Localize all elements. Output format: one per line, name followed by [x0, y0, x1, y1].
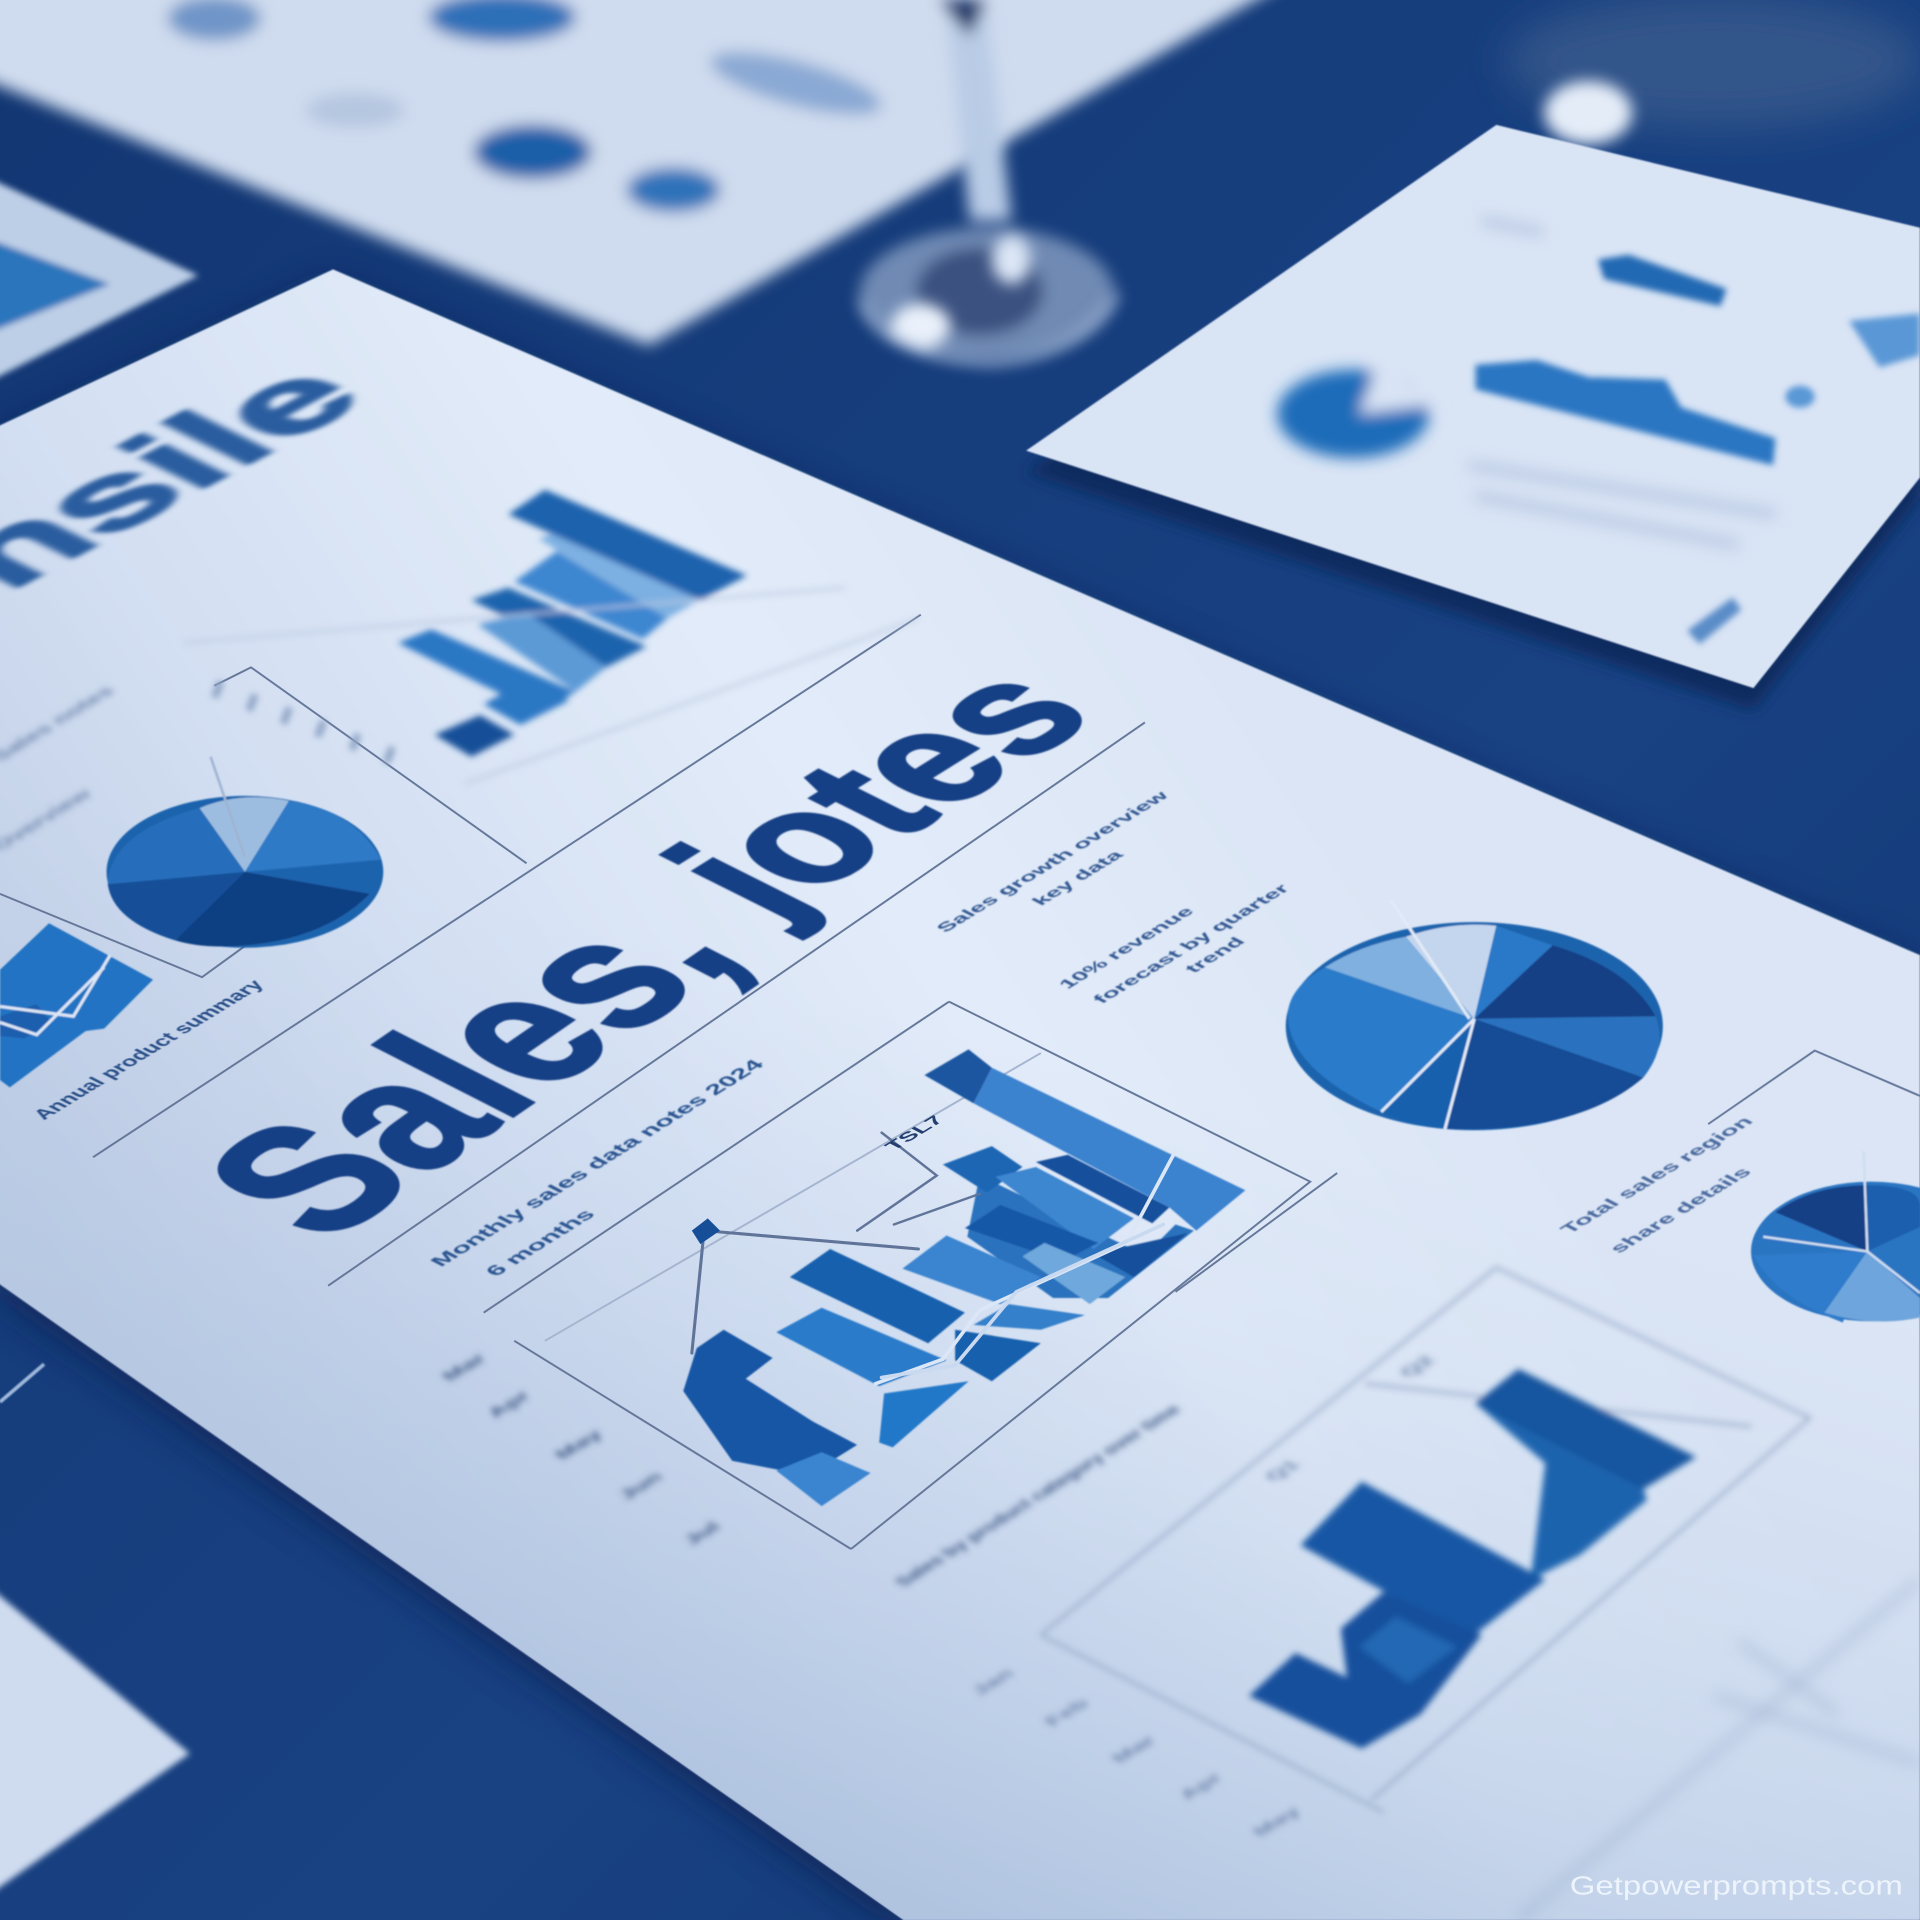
text block: subheading under title: Monthly sales data notes 2024 [425, 1057, 769, 1269]
axis labels [438, 1352, 1185, 1589]
panel: right document [1026, 125, 1920, 710]
blurred text lines on right document [1469, 220, 1776, 545]
axis labels: Apr [483, 1389, 535, 1420]
bars [683, 1049, 1245, 1506]
lower chart axis labels: Apr [1175, 1771, 1227, 1802]
text block: caption below left chart: Annual product summary [28, 977, 269, 1123]
text block: notes above pie: Sales growth overview [932, 789, 1174, 935]
central bar chart [438, 1002, 1337, 1589]
icon: blurred glass top right [1506, 0, 1920, 129]
chart frame [514, 1002, 1337, 1549]
icon: small stray mark on table [0, 1364, 44, 1402]
text block: notes above pie: key data [1028, 848, 1128, 908]
lower chart axis labels [967, 1354, 1440, 1839]
text block: left notes [0, 684, 119, 853]
right pie chart [1751, 1151, 1920, 1322]
axis labels: Jun [614, 1471, 668, 1502]
axis labels: Mar [438, 1352, 491, 1383]
panel: left edge blurred document [0, 178, 198, 382]
lower chart axis labels: Feb [1040, 1697, 1094, 1728]
panel: top blurred document [0, 0, 1298, 345]
trend lines [692, 1133, 1176, 1384]
blurred bars on right document [1476, 255, 1920, 644]
title: main heading: Sales, [152, 868, 785, 1266]
icon: glass stem and base [860, 0, 1117, 362]
text block: caption beside right pie: share details [1604, 1165, 1756, 1256]
axis labels: May [550, 1428, 608, 1461]
title: main heading: jotes [620, 642, 1135, 940]
corner line chart, blurred [1518, 1580, 1920, 1920]
text block: subheading under title: 6 months [480, 1206, 600, 1279]
upper-left pie chart [107, 757, 383, 948]
text block: notes above pie: trend [1181, 935, 1249, 975]
blurred pie on right document [1277, 365, 1439, 458]
panel: bottom-left document [0, 1586, 190, 1896]
left partial chart [0, 923, 153, 1087]
title: main heading [152, 642, 1135, 1266]
icon: glass highlight [1544, 81, 1632, 144]
axis labels: Jul [679, 1520, 726, 1547]
chart marker [692, 1218, 720, 1244]
text block: caption beside right pie: Total sales region [1555, 1114, 1758, 1236]
axis labels: Sales by product category over time [890, 1403, 1185, 1589]
text block: notes above pie: 10% revenue [1055, 905, 1199, 991]
watermark: Getpowerprompts.com [1570, 1872, 1903, 1900]
central pie chart [1286, 900, 1663, 1130]
right chart frame [1708, 1051, 1920, 1124]
lower chart axis labels: May [1248, 1805, 1306, 1839]
divider lines around heading [0, 615, 1145, 1313]
upper-left bar chart [184, 490, 918, 784]
chart label: TSL7 [881, 1113, 948, 1153]
lower bar chart [1041, 1267, 1810, 1812]
lower chart axis labels: Mar [1107, 1734, 1161, 1765]
lower chart axis labels: Q2 [1395, 1354, 1440, 1379]
lower chart axis labels: Q1 [1260, 1458, 1305, 1483]
blurred chart marks on top document [168, 0, 887, 212]
lower chart axis labels: Jan [967, 1667, 1019, 1698]
text block: notes above pie [932, 789, 1294, 1006]
text block: notes above pie: forecast by quarter [1089, 882, 1294, 1006]
